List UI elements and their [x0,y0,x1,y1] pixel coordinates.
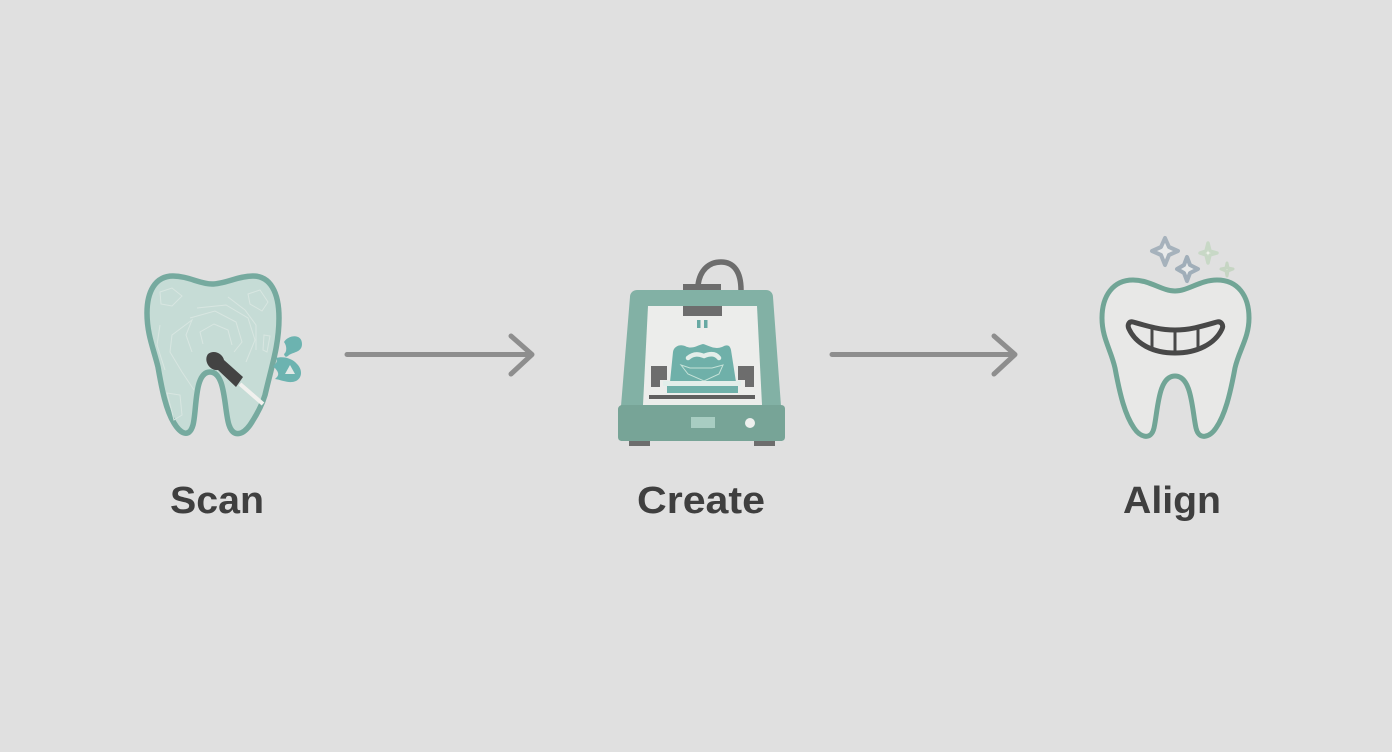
scan data fragments [273,336,302,382]
tooth body [147,276,279,434]
label: Scan: Scan [170,480,264,522]
smile [1128,322,1223,353]
printer cable [698,262,741,290]
arrow: create to align [832,336,1015,374]
printer frame [621,290,781,406]
sparkles [1152,238,1233,281]
contour scan lines [157,288,270,420]
nozzles [697,320,708,328]
build plate [649,395,755,399]
display [691,417,715,428]
printer base [618,405,785,441]
button [745,418,755,428]
label: Align: Align [1123,480,1221,522]
printer top block [683,284,721,291]
print head [683,306,722,316]
tooth outline [1102,280,1249,436]
icon: scanned tooth [147,276,302,434]
icon: clean smiling tooth [1102,238,1249,436]
printed dental model [663,344,741,393]
printer window [643,306,762,405]
side clamps [651,366,754,387]
arrow: scan to create [347,336,532,374]
scanner wand [206,352,263,404]
feet [629,441,775,446]
icon: 3D printer [618,262,785,446]
label: Create: Create [637,480,765,522]
